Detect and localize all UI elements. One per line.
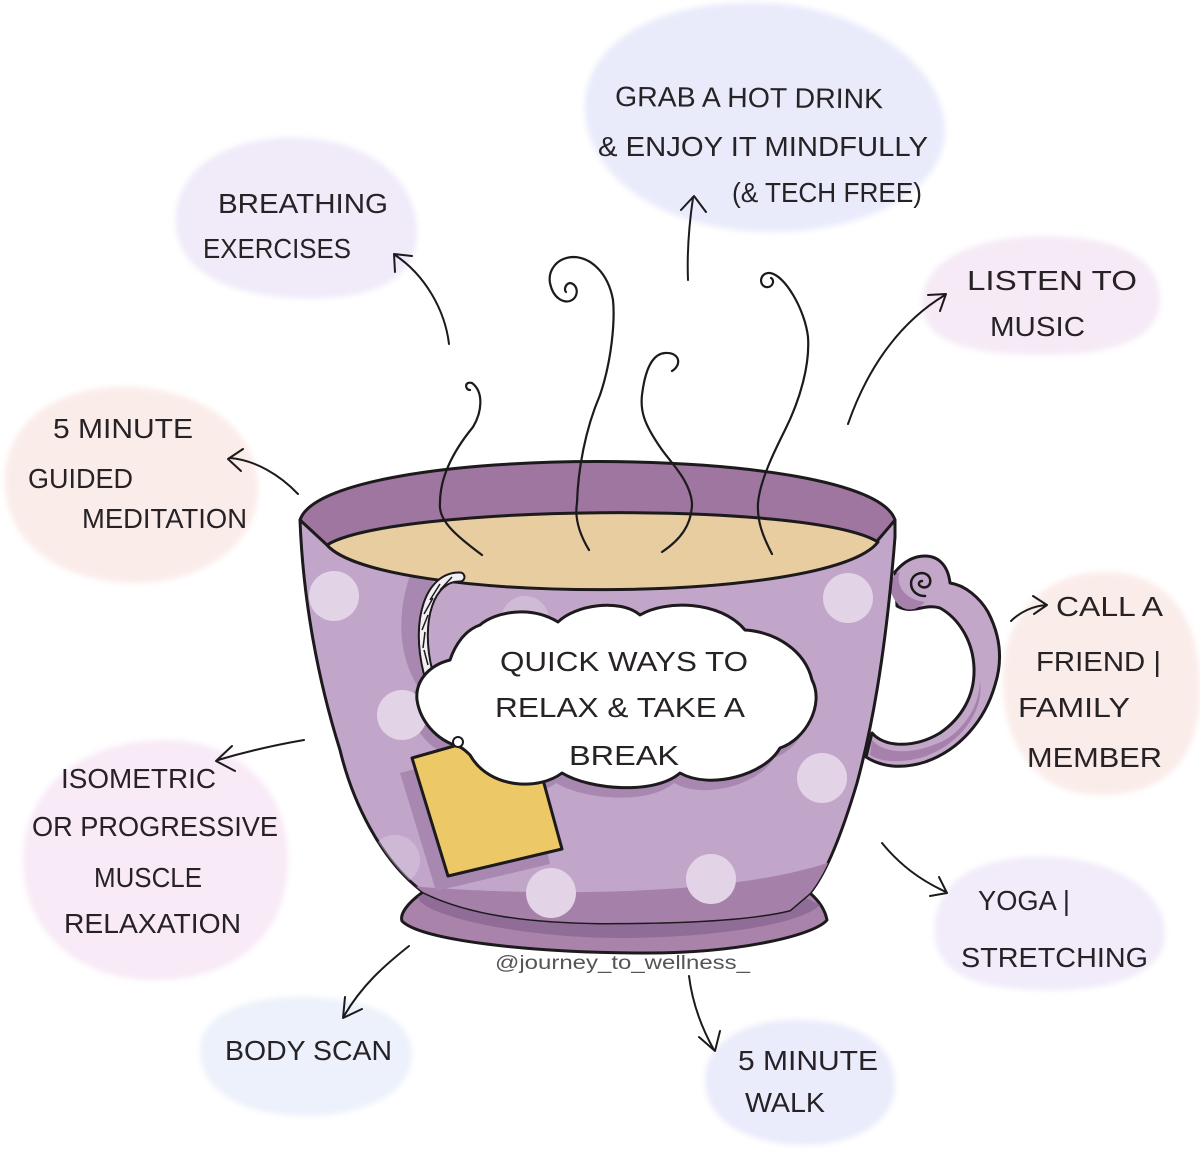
callout: call a friend or family member: MEMBER [1027, 742, 1162, 773]
rim and inner cup [300, 462, 895, 588]
cup body [300, 520, 895, 923]
callout: muscle relaxation: RELAXATION [64, 908, 241, 939]
callout: call a friend or family member: FRIEND | [1036, 646, 1161, 677]
arrows [216, 196, 1047, 1051]
cloud title: RELAX & TAKE A [495, 692, 745, 723]
callout: five minute walk [705, 1020, 895, 1145]
tag knot [453, 737, 463, 747]
callout: yoga stretching: YOGA | [978, 885, 1070, 916]
callout: guided meditation [5, 387, 258, 583]
callout: hot drink: & ENJOY IT MINDFULLY [598, 131, 928, 162]
callout: guided meditation: MEDITATION [82, 503, 247, 534]
callout: five minute walk: 5 MINUTE [738, 1045, 878, 1076]
cup shading [309, 571, 873, 925]
steam [440, 257, 808, 555]
credit: @journey_to_wellness_ [495, 953, 751, 974]
callout: muscle relaxation: OR PROGRESSIVE [32, 811, 278, 842]
cloud title: QUICK WAYS TO [500, 646, 748, 677]
callout: listen to music [922, 236, 1160, 355]
callout: breathing exercises [176, 138, 417, 298]
callout: hot drink: GRAB A HOT DRINK [615, 81, 884, 114]
callout: breathing exercises: EXERCISES [203, 233, 351, 264]
tea [327, 513, 878, 590]
cloud title: BREAK [569, 740, 679, 771]
callout: muscle relaxation [23, 740, 288, 980]
callout: call a friend or family member: CALL A [1056, 591, 1163, 622]
callout: five minute walk: WALK [745, 1087, 825, 1118]
callout: hot drink [585, 3, 945, 232]
callout: yoga stretching: STRETCHING [961, 942, 1148, 973]
tea bag string [422, 577, 460, 672]
tea bag tag [412, 725, 562, 876]
callout: muscle relaxation: MUSCLE [94, 862, 202, 893]
callout: guided meditation: 5 MINUTE [53, 413, 193, 444]
callout: guided meditation: GUIDED [28, 463, 133, 494]
callout: listen to music: MUSIC [990, 311, 1085, 342]
cloud title [495, 646, 748, 771]
callout: body scan [200, 997, 412, 1116]
callout: hot drink: (& TECH FREE) [732, 177, 922, 208]
callout: call a friend or family member: FAMILY [1018, 692, 1130, 723]
callout: muscle relaxation: ISOMETRIC [61, 763, 216, 794]
callout: body scan: BODY SCAN [225, 1035, 392, 1066]
handle [866, 556, 999, 766]
callout: call a friend or family member [1003, 572, 1200, 795]
callout: breathing exercises: BREATHING [218, 188, 388, 219]
saucer [402, 890, 827, 953]
cloud [417, 605, 816, 788]
teacup [300, 257, 999, 925]
callout: yoga stretching [935, 857, 1165, 990]
callout: listen to music: LISTEN TO [967, 265, 1137, 296]
